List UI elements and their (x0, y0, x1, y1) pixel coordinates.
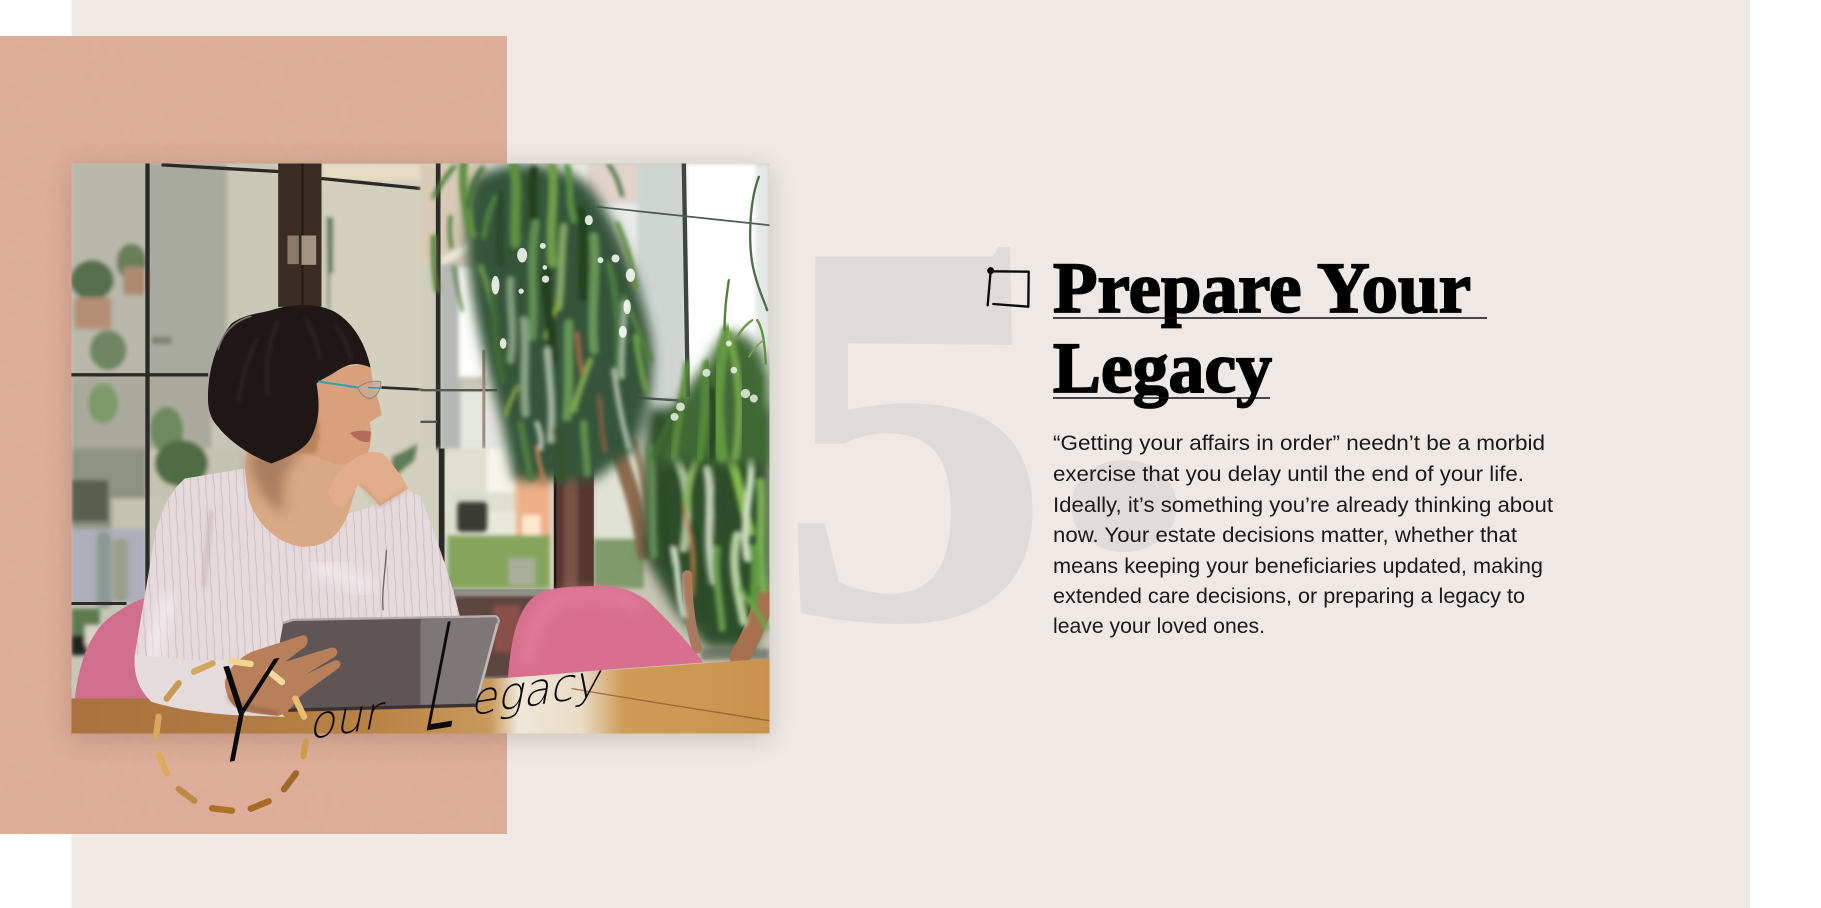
woman (135, 305, 460, 715)
heading: Legacy (1053, 328, 1272, 408)
second plant fronds (654, 333, 769, 463)
wooden post with hinge (278, 164, 321, 307)
body paragraph (1053, 432, 1553, 638)
body paragraph: means keeping your beneficiaries updated, making (1053, 555, 1543, 578)
tablet (280, 616, 499, 710)
script caption: Your Legacy: L (412, 589, 480, 768)
script caption: Your Legacy: egacy (468, 653, 607, 727)
script caption: Your Legacy: our (306, 685, 389, 750)
body paragraph: exercise that you delay until the end of your life. (1053, 463, 1524, 486)
photo: woman with tablet among plants (71, 164, 769, 733)
body paragraph: now. Your estate decisions matter, whether that (1053, 524, 1517, 547)
sweater (135, 468, 460, 715)
background, lower right: bokeh, column, frames (420, 448, 769, 678)
plant foliage, lower right (614, 408, 769, 657)
script caption: Your Legacy (195, 566, 624, 802)
right chair (508, 586, 703, 678)
plant foliage, upper (hanging plant and palm) (434, 164, 769, 483)
hair (208, 305, 370, 463)
face (315, 364, 382, 465)
sleeve cuff over table (135, 655, 285, 717)
gold dashed circle (156, 661, 306, 811)
body paragraph: Ideally, it’s something you’re already thinking about (1053, 494, 1553, 517)
bright window, right (420, 164, 769, 457)
bokeh highlights (491, 215, 635, 349)
body paragraph: “Getting your affairs in order” needn’t be a morbid (1053, 432, 1545, 455)
photo drop shadow (72, 167, 769, 739)
neck and chest (244, 452, 356, 547)
body paragraph: extended care decisions, or preparing a legacy to (1053, 585, 1525, 608)
checkbox icon (988, 268, 1029, 307)
table (72, 658, 769, 733)
upper hand (328, 452, 408, 507)
lower hand (225, 635, 341, 716)
body paragraph: leave your loved ones. (1053, 615, 1265, 638)
big numeral 5 (777, 129, 1177, 736)
heading: Prepare Your (1053, 248, 1471, 328)
heading underlines (1053, 318, 1487, 398)
big numeral 5: 5 (777, 129, 1051, 736)
window frames, left (72, 164, 435, 603)
left chair (75, 598, 151, 698)
pink paper panel (0, 36, 507, 834)
script caption: Your Legacy: Y (196, 631, 287, 799)
window and wall background, left (71, 164, 455, 655)
glasses (318, 381, 381, 398)
heading (1053, 248, 1471, 408)
